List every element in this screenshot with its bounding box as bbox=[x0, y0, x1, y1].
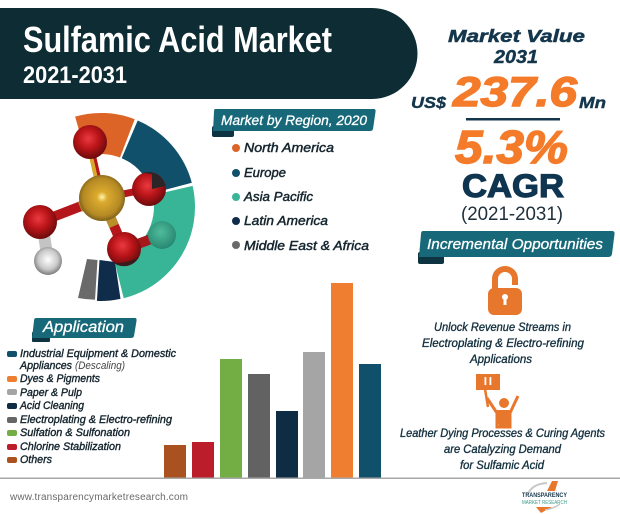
footer website: www.transparencymarketresearch.com bbox=[9, 492, 188, 503]
legend: regions: Europe bbox=[244, 166, 286, 180]
legend: regions: Middle East & Africa bbox=[244, 239, 369, 253]
legend: applications bbox=[7, 348, 176, 466]
CAGR callout bbox=[455, 121, 568, 225]
CAGR callout: 5.3% bbox=[455, 121, 568, 173]
CAGR callout: CAGR bbox=[462, 168, 564, 204]
heading: market by region bbox=[212, 109, 376, 137]
text: opportunity two bbox=[400, 426, 605, 472]
legend: regions: Asia Pacific bbox=[243, 190, 314, 204]
icon: open padlock bbox=[488, 269, 522, 315]
legend: applications: Dyes & Pigments bbox=[20, 373, 100, 385]
text: opportunity one bbox=[422, 320, 584, 366]
market value callout: 2031 bbox=[493, 47, 538, 67]
title: Sulfamic Acid Market bbox=[23, 19, 332, 60]
icon: sulfamic acid molecule bbox=[23, 125, 176, 275]
bar chart: application share bbox=[164, 283, 381, 478]
legend: applications: Sulfation & Sulfonation bbox=[20, 427, 130, 439]
legend: applications: Appliances bbox=[19, 360, 72, 372]
donut chart: market by region bbox=[75, 113, 195, 301]
legend: applications: Electroplating & Electro-refining bbox=[20, 414, 173, 426]
text: opportunity one: Applications bbox=[469, 352, 532, 366]
text: opportunity one: Unlock Revenue Streams in bbox=[434, 320, 571, 334]
heading: application bbox=[32, 318, 137, 342]
legend: applications: Chlorine Stabilization bbox=[20, 441, 121, 453]
text: opportunity two: are Catalyzing Demand bbox=[444, 442, 561, 456]
icon: person holding sign bbox=[476, 374, 518, 427]
legend: applications: (Descaling) bbox=[75, 360, 125, 372]
market value callout: 237.6 bbox=[452, 68, 578, 115]
legend: regions: Latin America bbox=[244, 214, 328, 228]
text: opportunity two: Leather Dying Processes & Curing Agents bbox=[400, 426, 605, 440]
legend: applications: Industrial Equipment & Domestic bbox=[20, 348, 176, 360]
title banner bbox=[0, 8, 418, 99]
legend: applications: Paper & Pulp bbox=[20, 387, 82, 399]
market value callout: US$ bbox=[411, 95, 447, 112]
logo: transparency market research bbox=[522, 481, 568, 513]
logo: transparency market research: MARKET RESEARCH bbox=[522, 500, 567, 506]
legend: applications: Acid Cleaning bbox=[19, 400, 85, 412]
legend: applications: Others bbox=[20, 454, 52, 466]
heading: incremental opportunities: Incremental Opportunities bbox=[427, 236, 603, 253]
CAGR callout: (2021-2031) bbox=[461, 204, 563, 225]
market value callout: Market Value bbox=[448, 26, 585, 46]
legend: regions: North America bbox=[244, 141, 334, 155]
logo: transparency market research: TRANSPARENCY bbox=[522, 492, 568, 499]
heading: application: Application bbox=[42, 319, 124, 336]
legend: regions bbox=[232, 141, 369, 253]
market value callout: Mn bbox=[579, 95, 606, 112]
subtitle: period: 2021-2031 bbox=[23, 62, 127, 89]
heading: market by region: Market by Region, 2020 bbox=[221, 113, 367, 128]
heading: incremental opportunities bbox=[418, 231, 615, 264]
text: opportunity one: Electroplating & Electro-refining bbox=[422, 336, 584, 350]
market value callout bbox=[411, 26, 606, 115]
text: opportunity two: for Sulfamic Acid bbox=[460, 458, 544, 472]
